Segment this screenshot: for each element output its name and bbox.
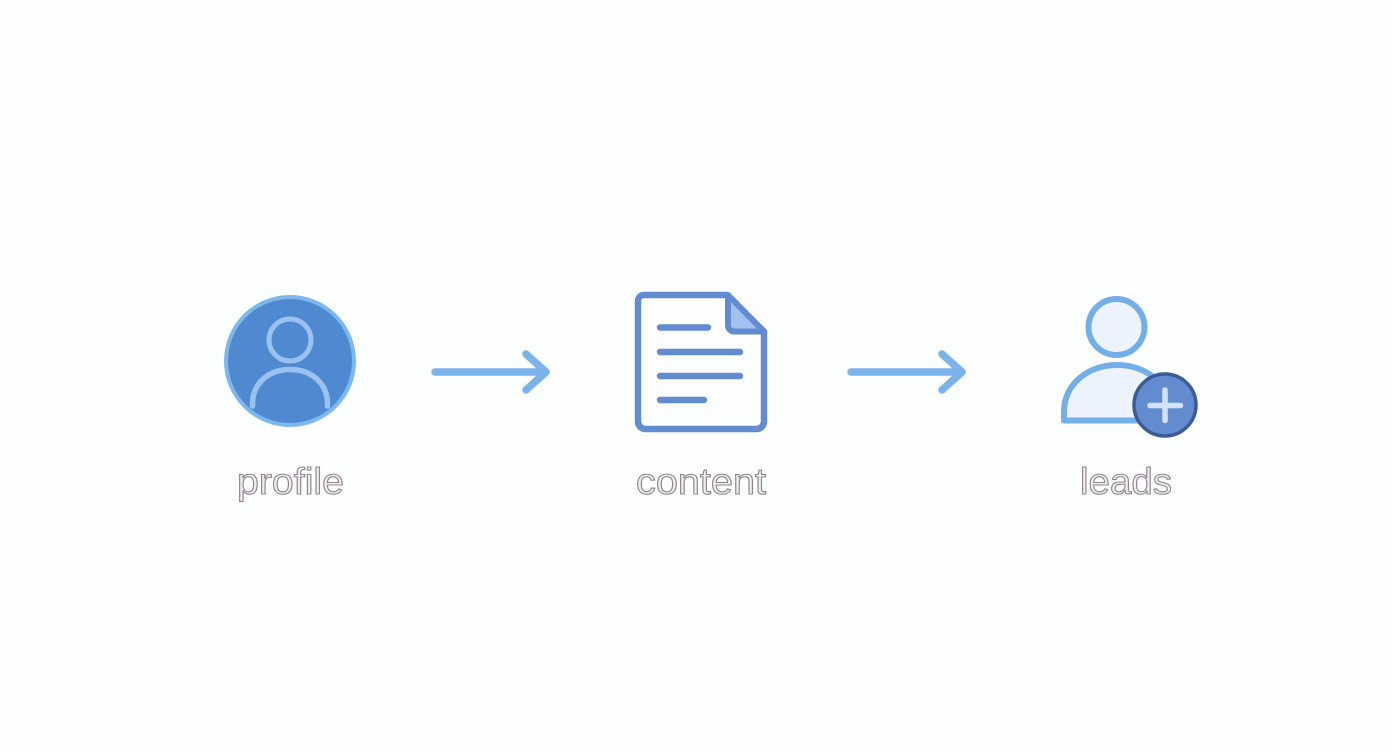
arrow: content to leads <box>851 354 962 390</box>
document corner fold <box>728 295 764 332</box>
plus badge <box>1134 374 1196 436</box>
label: profile: profile <box>237 461 344 502</box>
label: content: content <box>636 461 767 502</box>
icon: profile avatar <box>226 297 354 425</box>
icon: leads person with plus badge <box>1064 299 1196 436</box>
arrow: profile to content <box>435 354 546 390</box>
document text lines <box>660 328 740 400</box>
icon: content document <box>638 295 764 429</box>
label: leads: leads <box>1080 461 1172 502</box>
